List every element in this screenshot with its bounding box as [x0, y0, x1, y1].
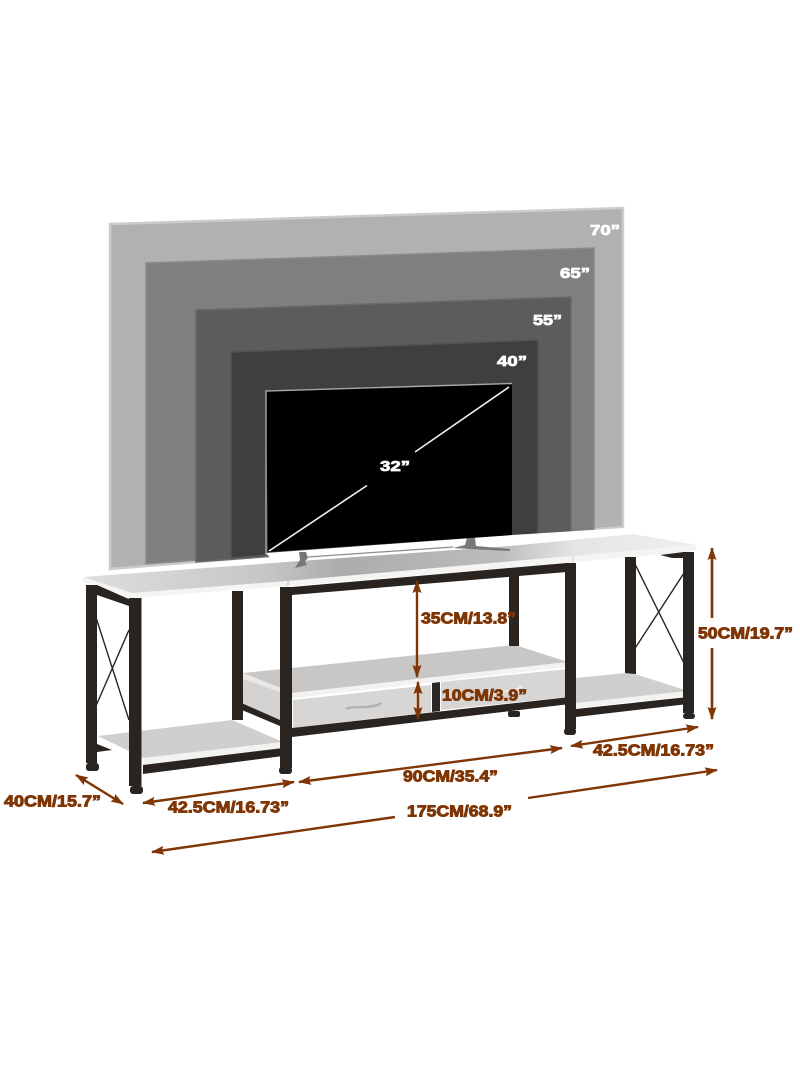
left lower shelf — [97, 720, 283, 774]
size label: 40 inch: 40” — [497, 353, 527, 370]
drawer handle — [488, 686, 522, 694]
diagonal measure — [269, 387, 509, 551]
rear shelf and middle shelf — [243, 645, 568, 693]
television, 32 inch — [266, 384, 512, 568]
screen: 40 inch — [231, 340, 538, 558]
left X brace — [92, 605, 129, 720]
dimension: right 42.5cm: 42.5CM/16.73” — [593, 742, 714, 760]
dimension: 40cm depth: 40CM/15.7” — [4, 794, 101, 810]
TV size comparison screens — [110, 208, 623, 569]
TV stand feet — [295, 538, 510, 568]
right drawer — [441, 669, 568, 710]
dimension: left 42.5cm — [143, 782, 294, 816]
dimension: 35cm clearance: 35CM/13.8” — [421, 610, 516, 628]
right X brace — [632, 558, 684, 663]
drawer divider — [432, 682, 440, 712]
rear legs — [232, 552, 684, 720]
dimension: 50cm height: 50CM/19.7” — [698, 626, 793, 642]
right lower shelf — [576, 673, 688, 717]
dimension: left 42.5cm: 42.5CM/16.73” — [168, 800, 289, 816]
dimension annotations — [4, 548, 793, 852]
dimension: 10cm drawer — [418, 682, 527, 719]
left drawer — [293, 685, 431, 728]
drawer handle — [346, 703, 381, 709]
dimension: 40cm depth — [4, 775, 123, 810]
dimension: 90cm centre: 90CM/35.4” — [403, 768, 498, 786]
dimension: 10cm drawer: 10CM/3.9” — [442, 688, 527, 704]
size label: 70 inch: 70” — [590, 222, 620, 239]
size label: 65 inch: 65” — [560, 265, 590, 282]
size label: 55 inch: 55” — [533, 312, 562, 329]
dimension: right 42.5cm — [571, 727, 714, 760]
dimension: 175cm total: 175CM/68.9” — [407, 804, 512, 820]
front legs and feet — [86, 552, 695, 794]
storage drawer side — [243, 679, 280, 723]
centre rails — [292, 563, 570, 737]
size label: 32 inch: 32” — [380, 458, 410, 475]
table top surface — [83, 527, 697, 598]
dimension: 35cm clearance — [417, 581, 516, 677]
screen: 55 inch — [196, 297, 571, 562]
TV panel — [266, 384, 512, 552]
screen: 65 inch — [146, 248, 594, 564]
TV stand frame — [86, 552, 695, 794]
dimension: 90cm centre — [299, 748, 562, 786]
screen: 70 inch — [110, 208, 623, 569]
dimension: 175cm total — [152, 770, 717, 852]
